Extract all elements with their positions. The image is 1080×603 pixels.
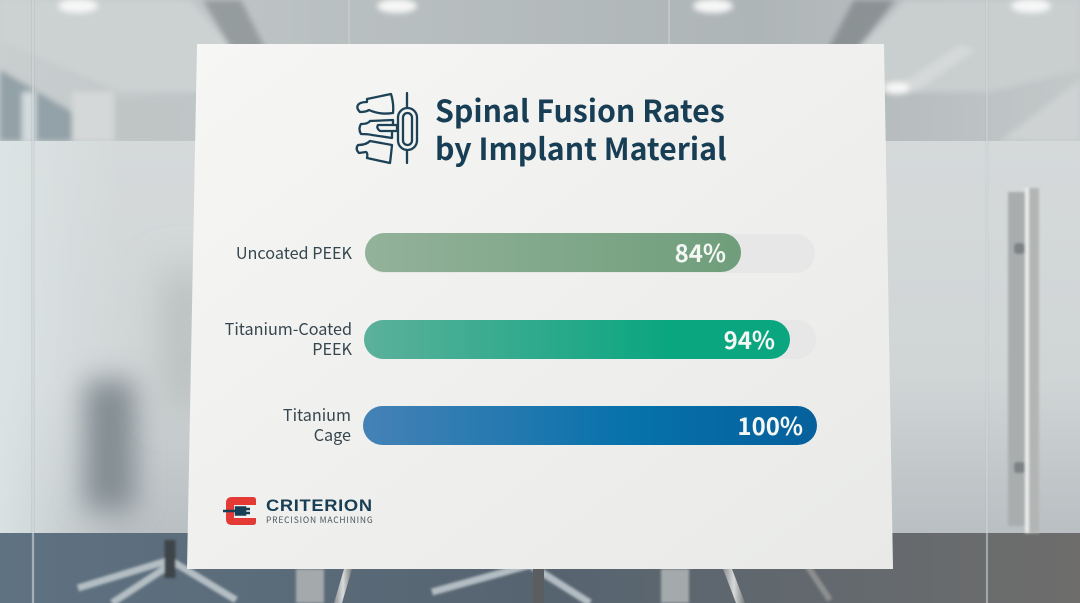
bar: 94% <box>364 320 790 359</box>
row: Uncoated PEEK <box>236 233 798 273</box>
bar: 94%: 94% <box>724 321 775 356</box>
track <box>364 320 816 359</box>
label: Titanium-Coated PEEK: Titanium-Coated <box>225 316 352 340</box>
title: Spinal Fusion Rates <box>435 86 725 130</box>
bar: 84%: 84% <box>675 234 726 269</box>
row: Titanium-Coated PEEK <box>225 316 790 360</box>
icon: red C mark with plug <box>223 497 256 525</box>
door handle <box>1008 188 1039 533</box>
label: Titanium-Coated PEEK <box>225 316 352 360</box>
title: by Implant Material <box>435 124 727 168</box>
tagline: PRECISION MACHINING <box>266 514 374 526</box>
bar: 100%: 100% <box>737 407 803 442</box>
icon: spine with implant <box>357 93 417 163</box>
wordmark: CRITERION <box>266 497 373 515</box>
label: Uncoated PEEK: Uncoated PEEK <box>236 240 352 264</box>
row: Titanium Cage <box>283 402 817 446</box>
easel legs <box>334 569 745 603</box>
label: Titanium Cage: Cage <box>314 422 351 446</box>
label: Titanium-Coated PEEK: PEEK <box>312 336 352 360</box>
sign board <box>187 44 893 569</box>
logo: Criterion Precision Machining <box>223 497 374 526</box>
bar: 84% <box>365 233 741 272</box>
track <box>365 234 815 273</box>
title <box>435 86 727 168</box>
label: Titanium Cage <box>283 402 351 446</box>
bar: 100% <box>363 406 817 445</box>
label: Titanium Cage: Titanium <box>283 402 351 426</box>
